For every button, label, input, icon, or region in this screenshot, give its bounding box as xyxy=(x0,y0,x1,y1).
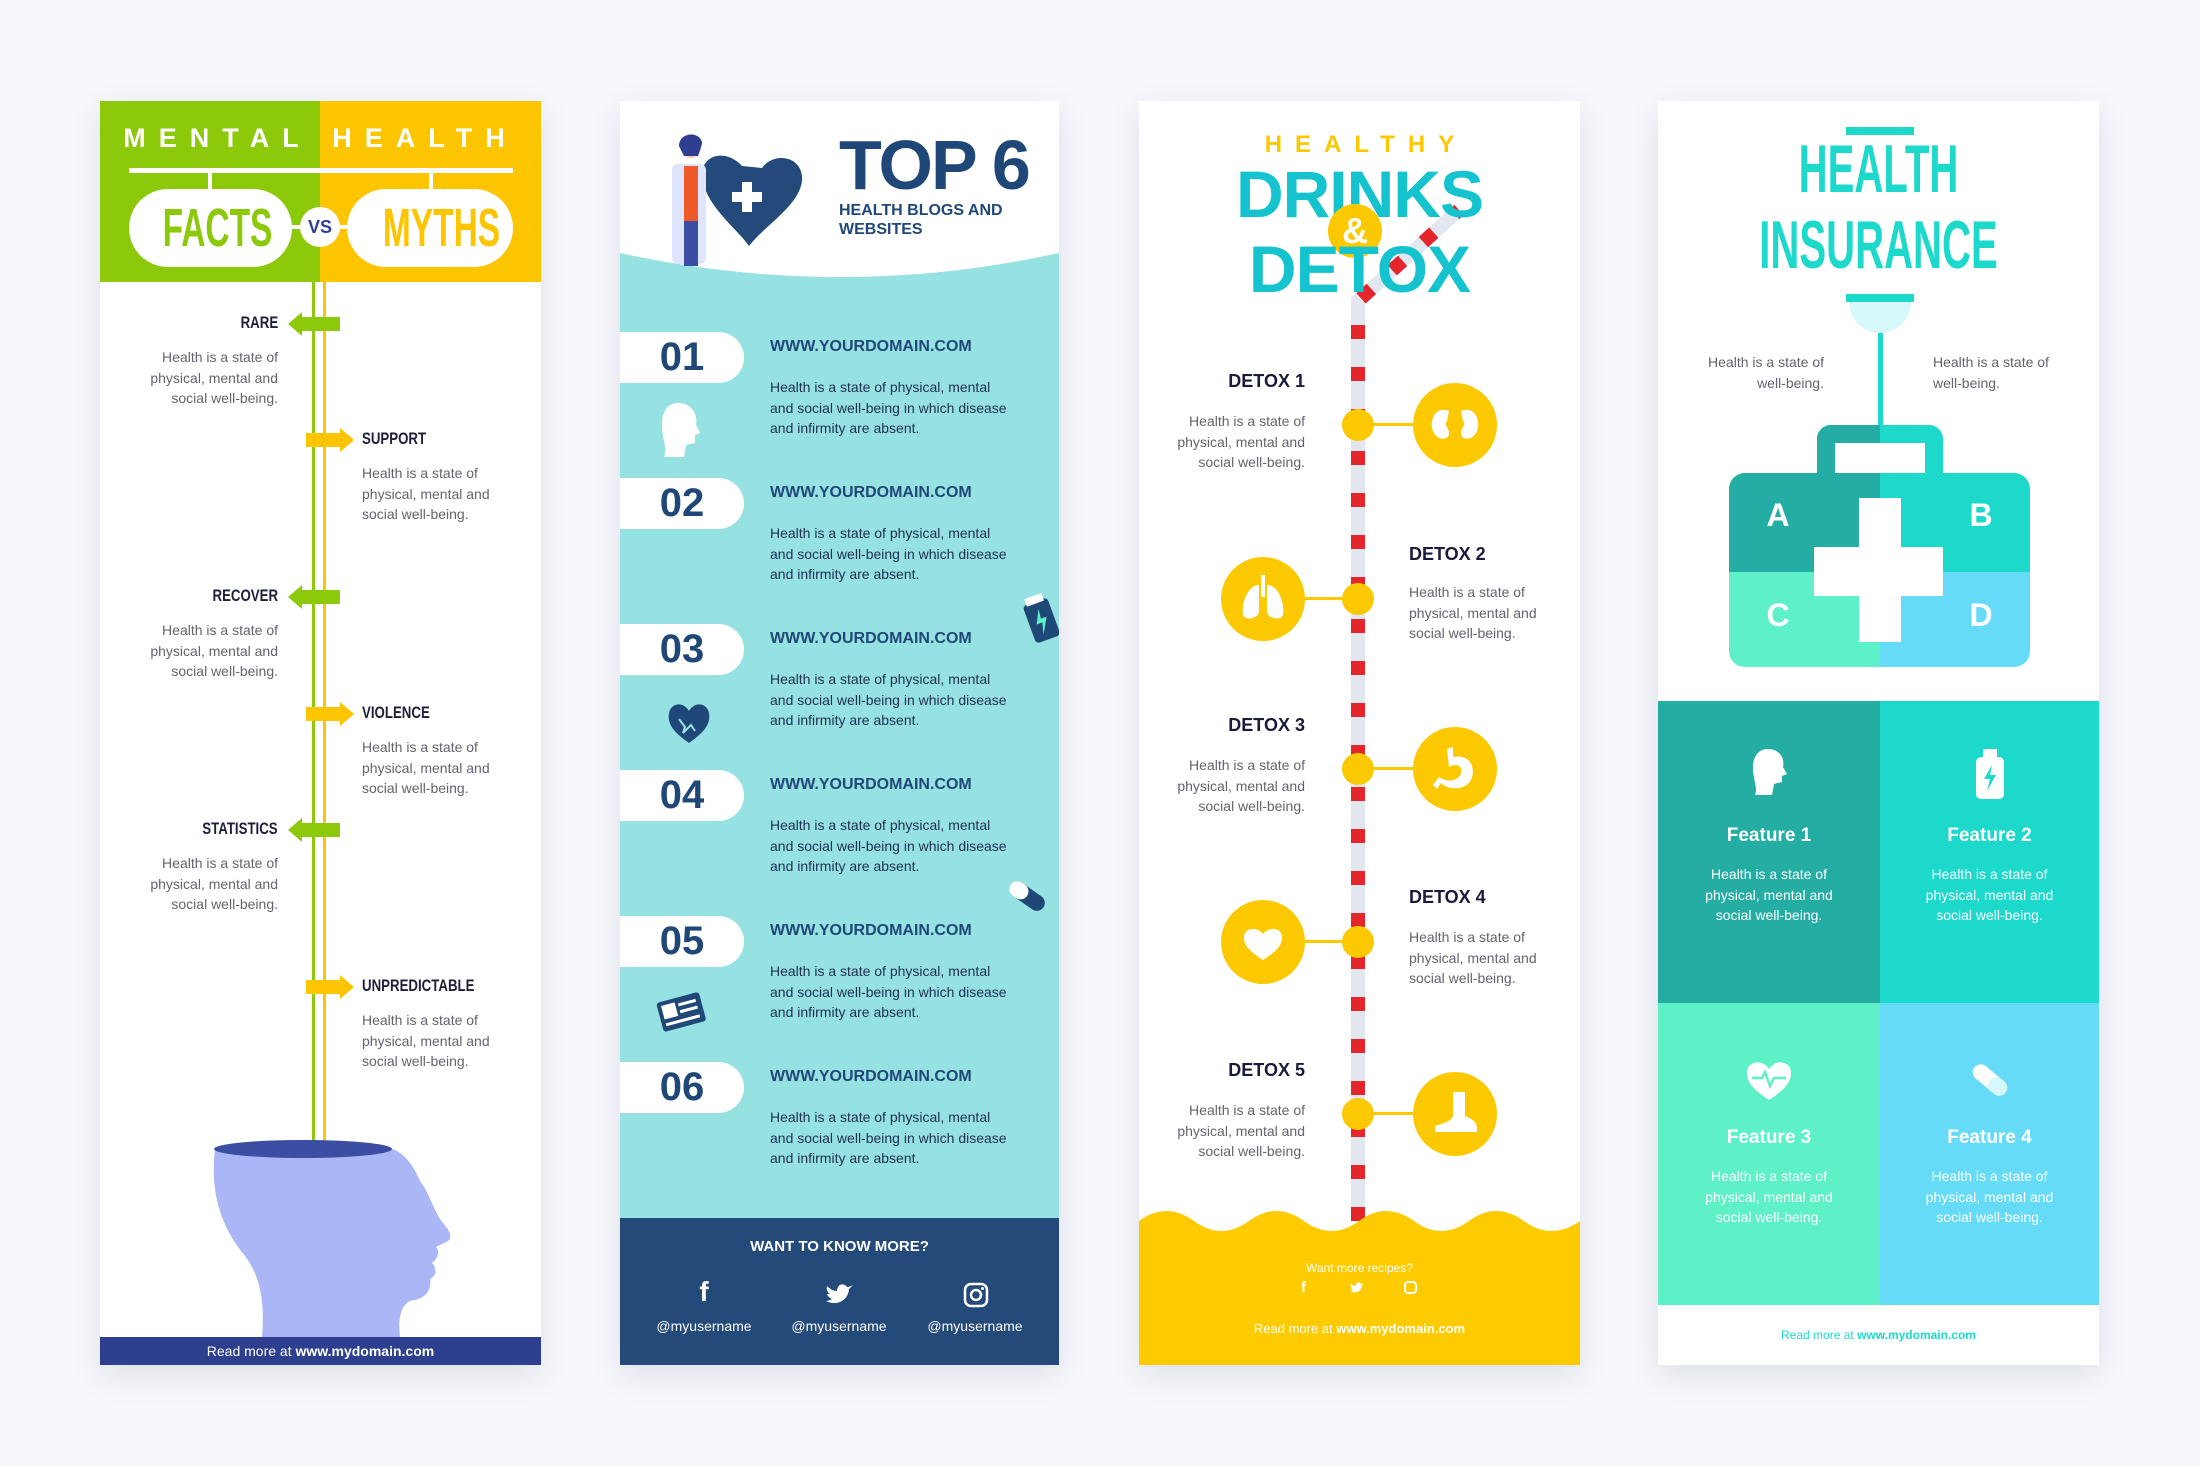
detox 1 xyxy=(1177,371,1497,470)
title: healthy: HEALTHY xyxy=(1265,131,1467,158)
first aid kit: A xyxy=(1766,497,1790,533)
icon: battery xyxy=(1024,593,1059,643)
feature 2: Feature 2 xyxy=(1947,825,2032,846)
first aid kit xyxy=(1729,425,2030,667)
item 01 xyxy=(620,332,1007,436)
timeline lines xyxy=(312,282,326,1140)
icon: head xyxy=(662,403,700,457)
item 06 xyxy=(620,1062,1007,1166)
subtitle xyxy=(839,202,1003,238)
pill: myths: MYTHS xyxy=(383,198,500,258)
detox 2: physical, mental and xyxy=(1409,604,1537,620)
feature 4: Feature 4 xyxy=(1947,1127,2032,1148)
item: statistics: social well-being. xyxy=(171,896,278,912)
detox 3: DETOX 3 xyxy=(1228,715,1305,735)
title: top 6: TOP 6 xyxy=(839,126,1029,204)
detox 1: physical, mental and xyxy=(1177,434,1305,450)
yellow wave footer: f xyxy=(1301,1279,1306,1296)
feature 4: Health is a state of xyxy=(1932,1168,2047,1184)
footer: want to know more: @myusername xyxy=(927,1318,1023,1334)
feature 1: Health is a state of xyxy=(1711,866,1827,882)
footer text: Read more at www.mydomain.com xyxy=(1781,1328,1976,1342)
subtitle: HEALTH BLOGS AND xyxy=(839,202,1003,219)
item 04: WWW.YOURDOMAIN.COM xyxy=(770,776,972,793)
icon: facebook: f xyxy=(699,1276,709,1307)
feature 2: social well-being. xyxy=(1936,907,2043,923)
icon: lungs xyxy=(1221,557,1305,641)
item 02: Health is a state of physical, mental xyxy=(770,525,990,541)
illustration: doctor with heart xyxy=(672,134,802,266)
yellow wave footer: Read more at www.mydomain.com xyxy=(1254,1321,1465,1336)
item: violence: Health is a state of xyxy=(362,739,478,755)
item: rare: RARE xyxy=(240,313,278,332)
item: recover: social well-being. xyxy=(171,663,278,679)
item 02: 02 xyxy=(660,481,704,525)
item: recover: physical, mental and xyxy=(150,642,278,658)
item 01: 01 xyxy=(660,335,704,379)
icon: instagram xyxy=(964,1282,988,1308)
item 05: and infirmity are absent. xyxy=(770,1004,919,1020)
detox 2: DETOX 2 xyxy=(1409,544,1486,564)
item: statistics: STATISTICS xyxy=(203,819,278,838)
side text left: Health is a state of xyxy=(1708,354,1824,370)
item 03: WWW.YOURDOMAIN.COM xyxy=(770,630,972,647)
title: detox: DETOX xyxy=(1249,232,1470,306)
feature 3: physical, mental and xyxy=(1705,1188,1833,1204)
title: health insurance: HEALTH xyxy=(1799,131,1958,207)
feature 4 xyxy=(1880,1003,2099,1305)
feature 1: Feature 1 xyxy=(1727,825,1811,846)
pill: myths xyxy=(347,189,513,267)
item 03: and social well-being in which disease xyxy=(770,692,1007,708)
yellow wave footer xyxy=(1139,1211,1580,1365)
item 01: WWW.YOURDOMAIN.COM xyxy=(770,338,972,355)
item: unpredictable: UNPREDICTABLE xyxy=(362,976,474,995)
feature 3: Health is a state of xyxy=(1711,1168,1827,1184)
item: rare xyxy=(150,312,340,406)
feature 3: social well-being. xyxy=(1716,1209,1822,1225)
panel: healthy drinks & detox xyxy=(1139,101,1580,1365)
item 03: and infirmity are absent. xyxy=(770,712,919,728)
item: statistics: physical, mental and xyxy=(150,876,278,892)
item 04: Health is a state of physical, mental xyxy=(770,817,990,833)
icon: pill xyxy=(1009,881,1045,911)
side text right xyxy=(1933,352,2049,393)
item 02 xyxy=(620,478,1007,582)
title bars xyxy=(1846,127,1914,135)
detox 3: Health is a state of xyxy=(1189,757,1305,773)
detox 2: Health is a state of xyxy=(1409,584,1525,600)
title: health insurance: INSURANCE xyxy=(1759,207,1998,283)
side text right: well-being. xyxy=(1933,374,2000,390)
feature 1 xyxy=(1658,701,1880,1003)
side text right: Health is a state of xyxy=(1933,354,2049,370)
item 05: Health is a state of physical, mental xyxy=(770,963,990,979)
item 05: 05 xyxy=(660,919,704,963)
item: rare: physical, mental and xyxy=(150,370,278,386)
detox 4: DETOX 4 xyxy=(1409,887,1486,907)
feature 1: physical, mental and xyxy=(1705,886,1833,902)
item: unpredictable: physical, mental and xyxy=(362,1032,490,1048)
detox 5: physical, mental and xyxy=(1177,1122,1305,1138)
side text left xyxy=(1708,352,1824,393)
item: unpredictable: Health is a state of xyxy=(362,1012,478,1028)
item 02: and infirmity are absent. xyxy=(770,566,919,582)
first aid kit: B xyxy=(1969,497,1993,533)
item: support: SUPPORT xyxy=(362,429,426,448)
title: drinks: DRINKS xyxy=(1236,157,1483,231)
icon: broken heart xyxy=(668,704,710,743)
ampersand circle: & xyxy=(1342,210,1368,251)
item: support: physical, mental and xyxy=(362,486,490,502)
item 01: Health is a state of physical, mental xyxy=(770,379,990,395)
item: violence xyxy=(306,702,490,796)
feature 3 xyxy=(1658,1003,1880,1305)
side text left: well-being. xyxy=(1757,374,1824,390)
footer bar xyxy=(100,1337,541,1365)
footer: want to know more: @myusername xyxy=(656,1318,752,1334)
illustration: head silhouette xyxy=(214,1140,450,1337)
feature 2: physical, mental and xyxy=(1926,886,2053,902)
feature 2: Health is a state of xyxy=(1932,866,2047,882)
item 01: and infirmity are absent. xyxy=(770,420,919,436)
detox 1: DETOX 1 xyxy=(1228,371,1305,391)
pill: facts xyxy=(129,189,292,267)
item: recover xyxy=(150,585,340,679)
header: green and yellow xyxy=(100,101,541,282)
footer: want to know more xyxy=(620,1218,1059,1365)
item 02: WWW.YOURDOMAIN.COM xyxy=(770,484,972,501)
item: violence: VIOLENCE xyxy=(362,703,430,722)
item: statistics xyxy=(150,818,340,912)
detox 4 xyxy=(1221,887,1537,986)
icon: twitter xyxy=(826,1284,853,1304)
item 03: 03 xyxy=(660,627,704,671)
detox 5 xyxy=(1177,1060,1497,1159)
item 03 xyxy=(620,624,1007,728)
item 06: 06 xyxy=(660,1065,704,1109)
item: violence: social well-being. xyxy=(362,780,469,796)
detox 2 xyxy=(1221,544,1537,641)
feature 2 xyxy=(1880,701,2099,1003)
yellow wave footer: Want more recipes? xyxy=(1306,1261,1413,1275)
first aid kit: C xyxy=(1766,597,1790,633)
icon: stomach xyxy=(1413,727,1497,811)
item: violence: physical, mental and xyxy=(362,760,490,776)
item 06: WWW.YOURDOMAIN.COM xyxy=(770,1068,972,1085)
item 05: WWW.YOURDOMAIN.COM xyxy=(770,922,972,939)
straw xyxy=(1351,204,1462,1221)
vs circle: VS xyxy=(308,217,332,237)
detox 5: DETOX 5 xyxy=(1228,1060,1305,1080)
icon: id card xyxy=(656,992,706,1032)
panel: health insurance xyxy=(1658,101,2099,1365)
detox 5: social well-being. xyxy=(1198,1143,1305,1159)
funnel connector xyxy=(1846,294,1914,425)
item 05: and social well-being in which disease xyxy=(770,984,1007,1000)
item 06: and infirmity are absent. xyxy=(770,1150,919,1166)
item: rare: social well-being. xyxy=(171,390,278,406)
feature 3: Feature 3 xyxy=(1727,1127,1811,1148)
detox 4: physical, mental and xyxy=(1409,950,1537,966)
detox 4: Health is a state of xyxy=(1409,929,1525,945)
pill: facts: FACTS xyxy=(163,198,272,258)
item: recover: Health is a state of xyxy=(162,622,278,638)
footer bar: Read more at www.mydomain.com xyxy=(207,1343,434,1359)
icon: heart xyxy=(1221,900,1305,984)
detox 5: Health is a state of xyxy=(1189,1102,1305,1118)
teal background with wave xyxy=(620,253,1059,1218)
icon: kidneys xyxy=(1413,383,1497,467)
item 06: Health is a state of physical, mental xyxy=(770,1109,990,1125)
ampersand circle xyxy=(1328,204,1382,258)
subtitle: WEBSITES xyxy=(839,221,923,238)
title: health insurance xyxy=(1759,131,1998,283)
item 01: and social well-being in which disease xyxy=(770,400,1007,416)
icon: foot xyxy=(1413,1072,1497,1156)
feature 4: social well-being. xyxy=(1936,1209,2043,1225)
panel: mental health facts vs myths xyxy=(100,101,541,1365)
usernames xyxy=(656,1318,1023,1334)
vs circle xyxy=(300,207,340,247)
detox 1: Health is a state of xyxy=(1189,413,1305,429)
detox 4: social well-being. xyxy=(1409,970,1516,986)
item 04 xyxy=(620,770,1007,874)
item: support xyxy=(306,428,490,522)
item 04: and social well-being in which disease xyxy=(770,838,1007,854)
footer: want to know more: @myusername xyxy=(791,1318,887,1334)
detox 2: social well-being. xyxy=(1409,625,1516,641)
detox 1: social well-being. xyxy=(1198,454,1305,470)
item 03: Health is a state of physical, mental xyxy=(770,671,990,687)
item 04: and infirmity are absent. xyxy=(770,858,919,874)
footer: want to know more: WANT TO KNOW MORE? xyxy=(750,1238,929,1255)
item: recover: RECOVER xyxy=(212,586,278,605)
first aid kit: D xyxy=(1969,597,1993,633)
item: statistics: Health is a state of xyxy=(162,855,278,871)
item: rare: Health is a state of xyxy=(162,349,278,365)
item: unpredictable xyxy=(306,975,490,1069)
item 04: 04 xyxy=(660,773,704,817)
feature 1: social well-being. xyxy=(1716,907,1822,923)
detox 3: social well-being. xyxy=(1198,798,1305,814)
feature 4: physical, mental and xyxy=(1926,1188,2053,1204)
detox 3: physical, mental and xyxy=(1177,778,1305,794)
item 02: and social well-being in which disease xyxy=(770,546,1007,562)
detox 3 xyxy=(1177,715,1497,814)
title: mental health: MENTAL HEALTH xyxy=(123,123,518,153)
item: support: Health is a state of xyxy=(362,465,478,481)
item 06: and social well-being in which disease xyxy=(770,1130,1007,1146)
item: unpredictable: social well-being. xyxy=(362,1053,469,1069)
panel: top 6 health blogs xyxy=(620,101,1059,1365)
item 05 xyxy=(620,916,1007,1020)
item: support: social well-being. xyxy=(362,506,469,522)
